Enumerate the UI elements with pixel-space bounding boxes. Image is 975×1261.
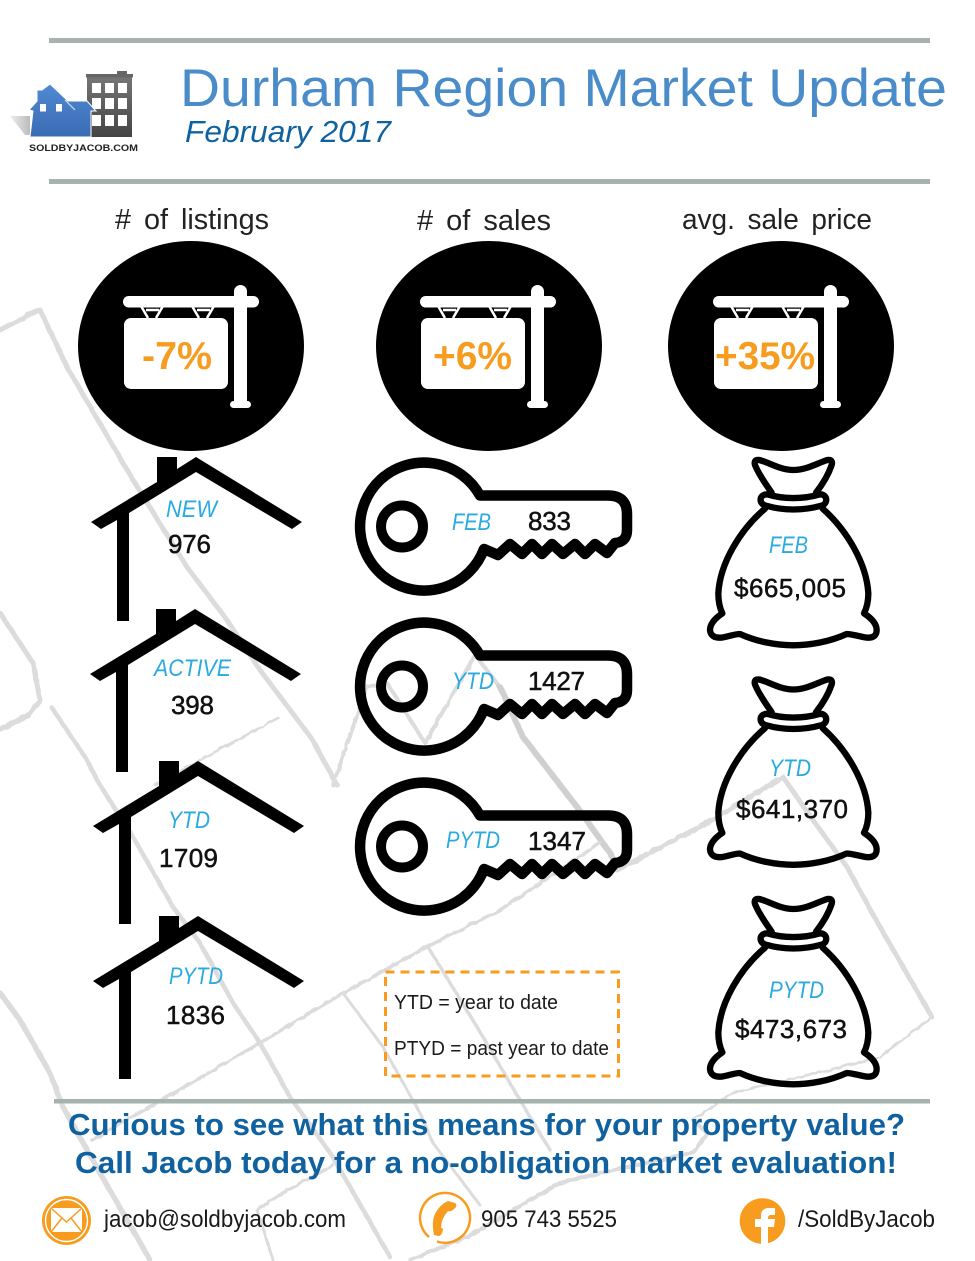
heading: # of listings: # of listings <box>115 204 269 236</box>
panel: average price change sign: +35% <box>715 335 815 378</box>
contact: Facebook: /SoldByJacob <box>798 1206 935 1233</box>
house: new listings <box>91 457 302 621</box>
bottom rule <box>54 1099 930 1104</box>
logo: SoldByJacob: SOLDBYJACOB.COM <box>29 143 138 154</box>
subtitle: date: February 2017 <box>185 114 393 149</box>
key: year to date sales: 1427 <box>528 666 585 696</box>
contact: phone: 905 743 5525 <box>481 1206 617 1233</box>
legend box: YTD = year to date <box>394 992 558 1014</box>
call to action: Curious to see what this means for your property value? <box>68 1107 905 1142</box>
money bag: February price <box>710 460 877 645</box>
key: year to date sales: YTD <box>452 668 494 695</box>
call to action <box>68 1107 905 1180</box>
money bag: February price: FEB <box>769 532 808 559</box>
key: February sales <box>360 463 627 591</box>
key: year to date sales <box>360 623 627 751</box>
key: past year to date sales <box>360 783 627 911</box>
background: street map scribble <box>0 310 932 1260</box>
money bag: past year to date price <box>710 899 877 1084</box>
house: past year to date listings: 1836 <box>166 1000 225 1030</box>
house: active listings: ACTIVE <box>152 655 232 682</box>
money bag: year to date price: YTD <box>769 755 811 782</box>
house: year to date listings <box>93 761 304 924</box>
panel: listings change sign <box>78 241 304 451</box>
heading: avg. sale price: avg. sale price <box>682 204 872 236</box>
key: past year to date sales: PYTD <box>446 827 500 854</box>
key: February sales: FEB <box>452 509 491 536</box>
contact: phone <box>420 1193 617 1243</box>
house: year to date listings: YTD <box>168 807 210 834</box>
house: past year to date listings <box>93 916 304 1079</box>
house: active listings <box>90 609 301 772</box>
house: new listings: NEW <box>166 496 219 523</box>
money bag: February price: $665,005 <box>734 573 846 603</box>
house: past year to date listings: PYTD <box>169 963 223 990</box>
money bag: year to date price <box>710 679 877 865</box>
house: year to date listings: 1709 <box>159 843 218 873</box>
title: Durham Region Market Update <box>180 59 947 118</box>
heading: # of sales: # of sales <box>417 205 551 237</box>
panel: listings change sign: -7% <box>142 335 212 378</box>
legend box: PTYD = past year to date <box>394 1038 609 1060</box>
contact: email <box>42 1196 346 1245</box>
key: past year to date sales: 1347 <box>528 826 586 856</box>
panel: average price change sign <box>668 241 894 451</box>
money bag: year to date price: $641,370 <box>736 794 848 824</box>
contact: email: jacob@soldbyjacob.com <box>103 1206 346 1233</box>
house: new listings: 976 <box>168 529 211 559</box>
key: February sales: 833 <box>528 506 571 536</box>
logo: SoldByJacob <box>10 71 138 154</box>
money bag: past year to date price: $473,673 <box>735 1014 847 1044</box>
contact: Facebook <box>740 1198 935 1244</box>
panel: sales change sign: +6% <box>433 335 512 378</box>
second rule <box>49 179 930 184</box>
legend box <box>386 972 618 1076</box>
call to action: Call Jacob today for a no-obligation market evaluation! <box>75 1145 897 1180</box>
top rule <box>49 38 930 43</box>
money bag: past year to date price: PYTD <box>769 977 824 1004</box>
house: active listings: 398 <box>171 690 214 720</box>
panel: sales change sign <box>376 241 602 451</box>
